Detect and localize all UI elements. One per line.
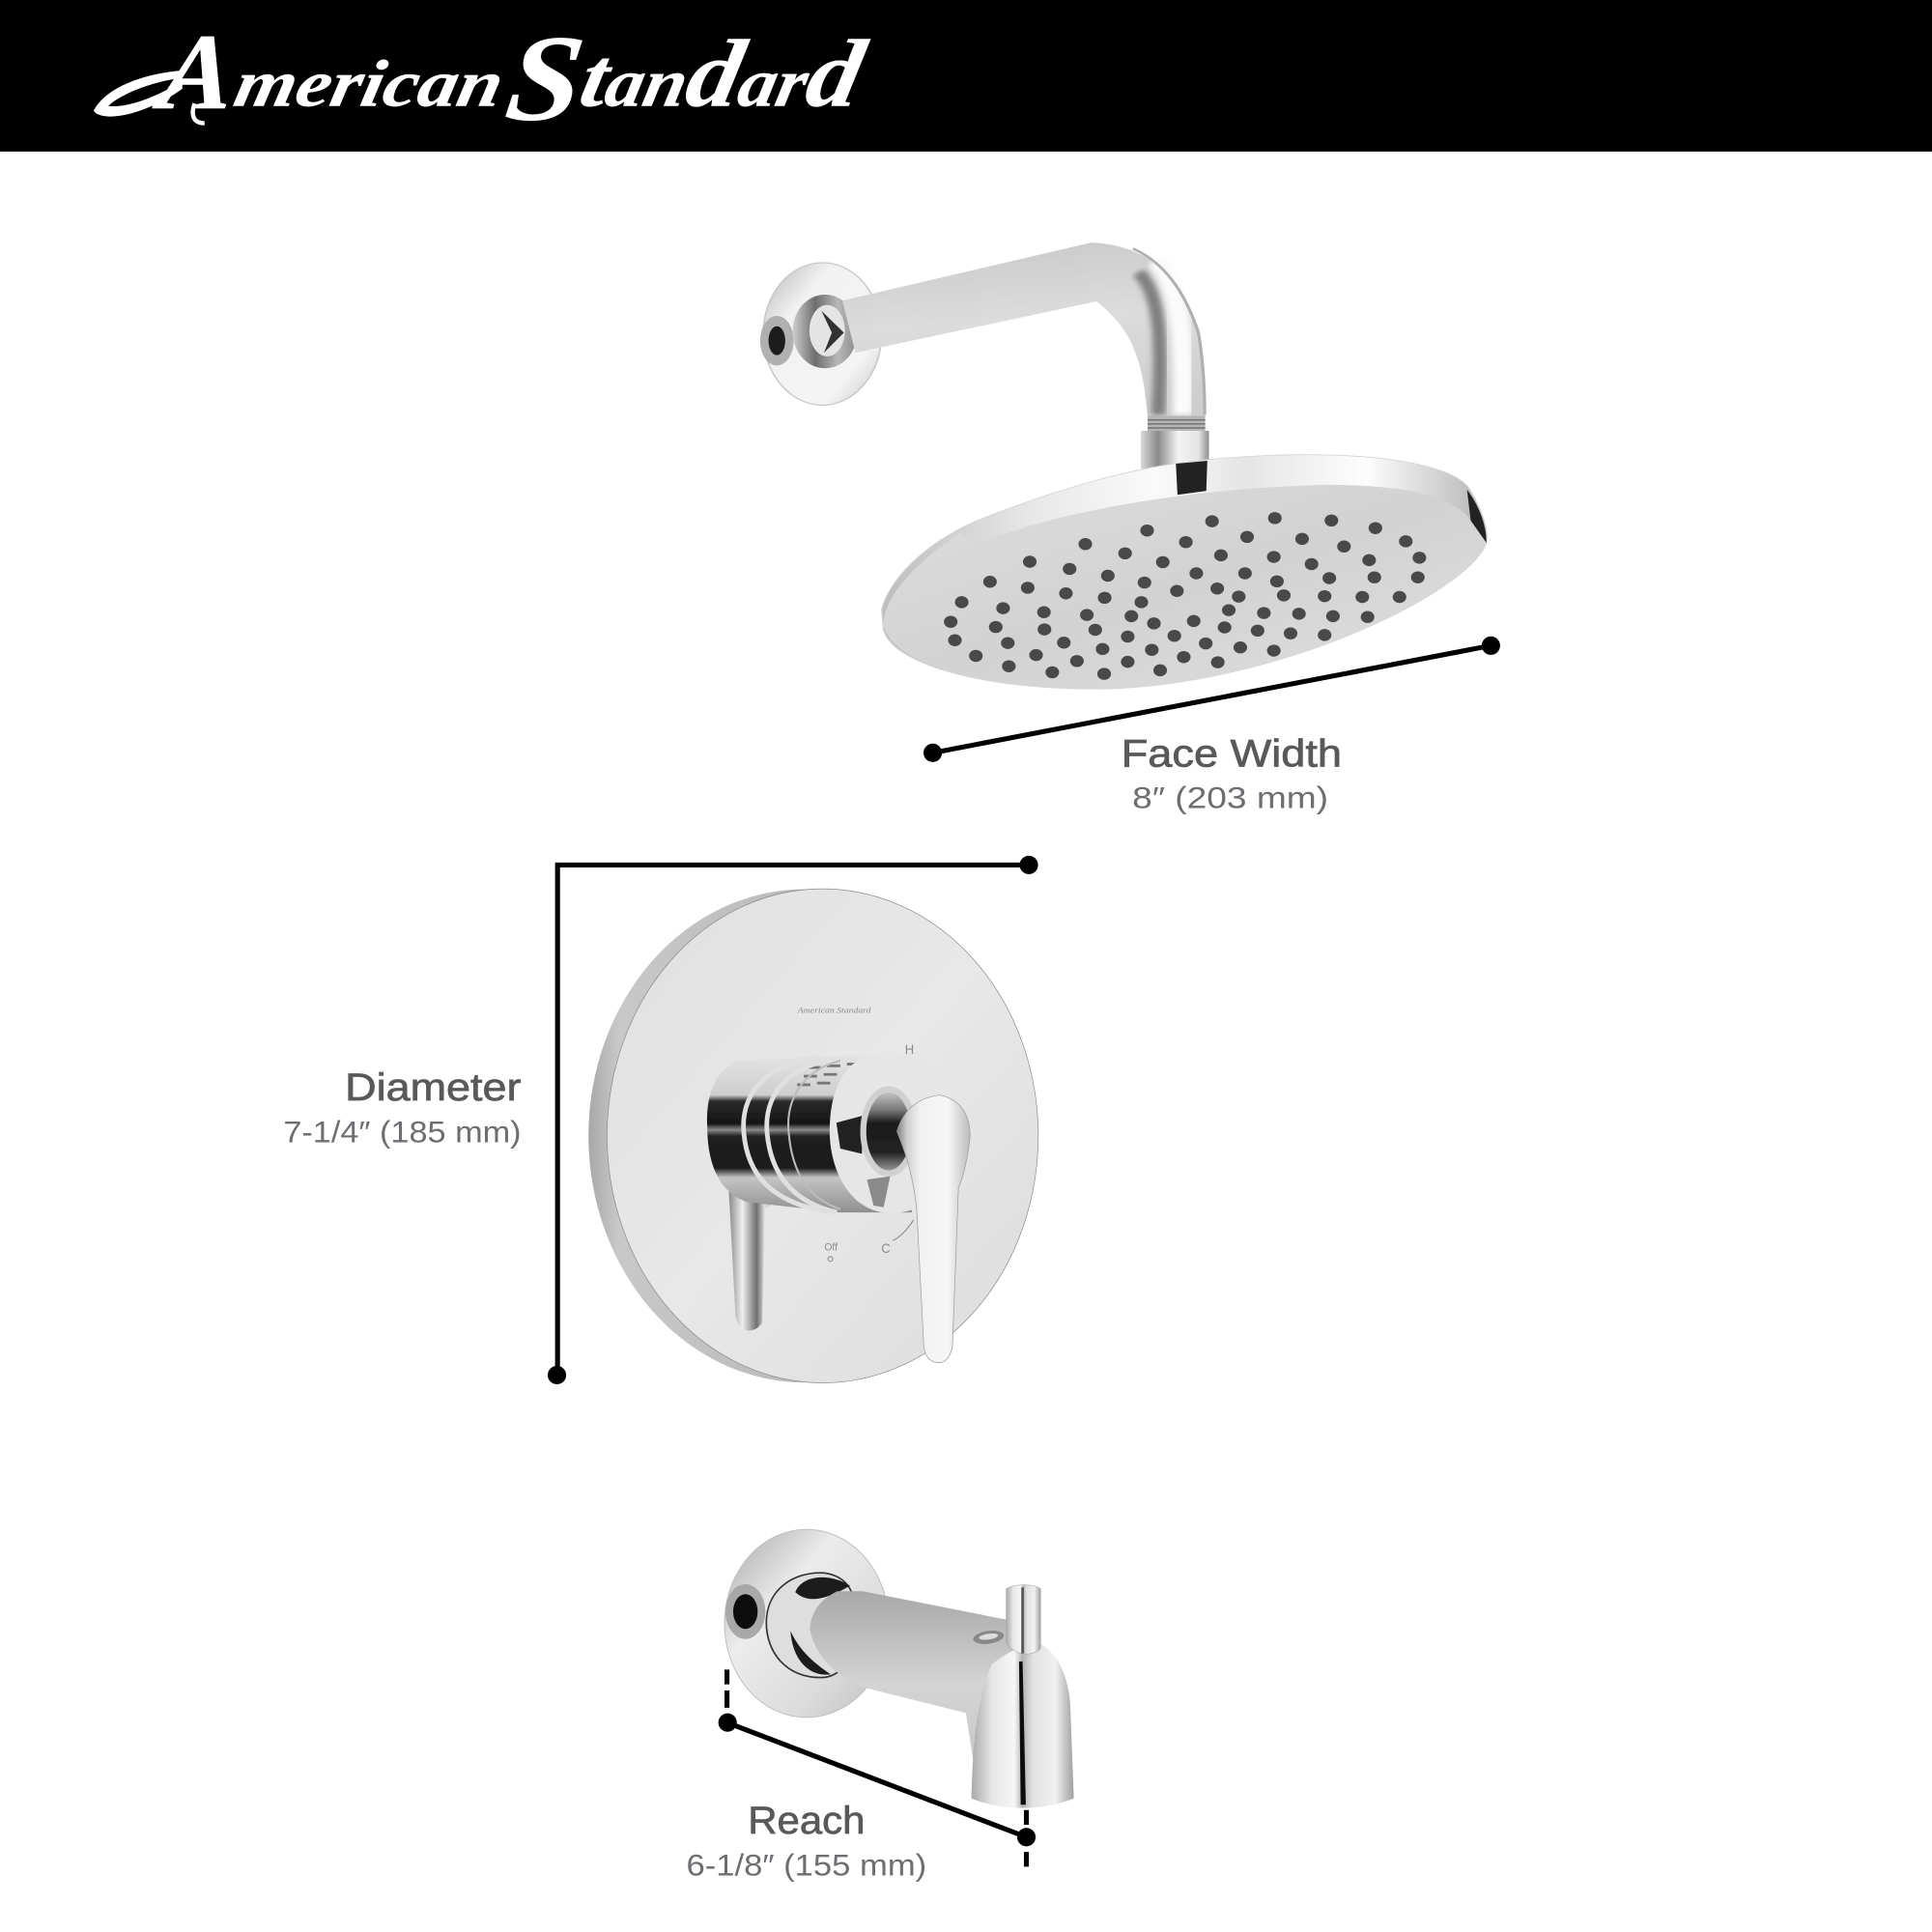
center reflection: [1019, 1662, 1026, 1804]
plate markings: American Standard: [797, 1007, 872, 1015]
label: diameter: [283, 1066, 522, 1149]
dimension line: face width: [923, 637, 1500, 762]
plate markings: H: [905, 1042, 914, 1057]
label: face width: 8″ (203 mm): [1132, 781, 1328, 815]
wall flange: [760, 263, 882, 405]
dimension line: diameter: [548, 856, 1038, 1384]
wall flange: [724, 1529, 889, 1718]
label: diameter: Diameter: [345, 1066, 522, 1109]
plate markings: [797, 1007, 914, 1262]
barrel rings: [744, 1057, 840, 1212]
product: rain shower head with arm: [760, 242, 1487, 689]
knurled grip: [797, 1065, 857, 1085]
label: reach: 6-1/8″ (155 mm): [686, 1847, 926, 1882]
brand logo: [94, 10, 875, 147]
head rim: [882, 455, 1487, 689]
stem shadow: [867, 1177, 891, 1208]
product: tub spout with diverter: [724, 1529, 1074, 1808]
header bar: [0, 0, 1932, 152]
label: reach: Reach: [748, 1800, 865, 1842]
label: face width: [1122, 732, 1342, 815]
threaded collar: [1141, 416, 1208, 469]
diverter knob: [972, 1585, 1040, 1654]
dimension line: reach: [719, 1669, 1036, 1866]
shower arm: [842, 242, 1206, 416]
spout head: [972, 1644, 1074, 1808]
trim plate: [588, 889, 1038, 1383]
label: diameter: 7-1/4″ (185 mm): [283, 1114, 522, 1149]
label: reach: [686, 1800, 926, 1882]
escutcheon: [766, 1573, 857, 1678]
rear lever: [729, 1192, 774, 1330]
brand logo: merican: [228, 47, 510, 122]
handle cap: [830, 1053, 965, 1213]
spray holes: [944, 512, 1426, 680]
plate markings: C: [881, 1241, 891, 1256]
spout arm: [810, 1591, 1069, 1797]
head face: [883, 485, 1487, 689]
rim reflections: [1176, 461, 1487, 543]
flange hole: [725, 1584, 765, 1639]
front lever: [896, 1095, 970, 1363]
cap inner ring: [864, 1090, 914, 1174]
plate markings: Off: [824, 1241, 838, 1253]
cap reflection: [837, 1116, 862, 1153]
brand logo: A: [150, 14, 241, 132]
brand logo: S: [498, 10, 592, 147]
product: valve trim plate with lever handle: [588, 889, 1038, 1383]
cartridge barrel: [707, 1054, 912, 1212]
brand logo: tandard: [572, 20, 875, 127]
label: face width: Face Width: [1122, 732, 1342, 775]
